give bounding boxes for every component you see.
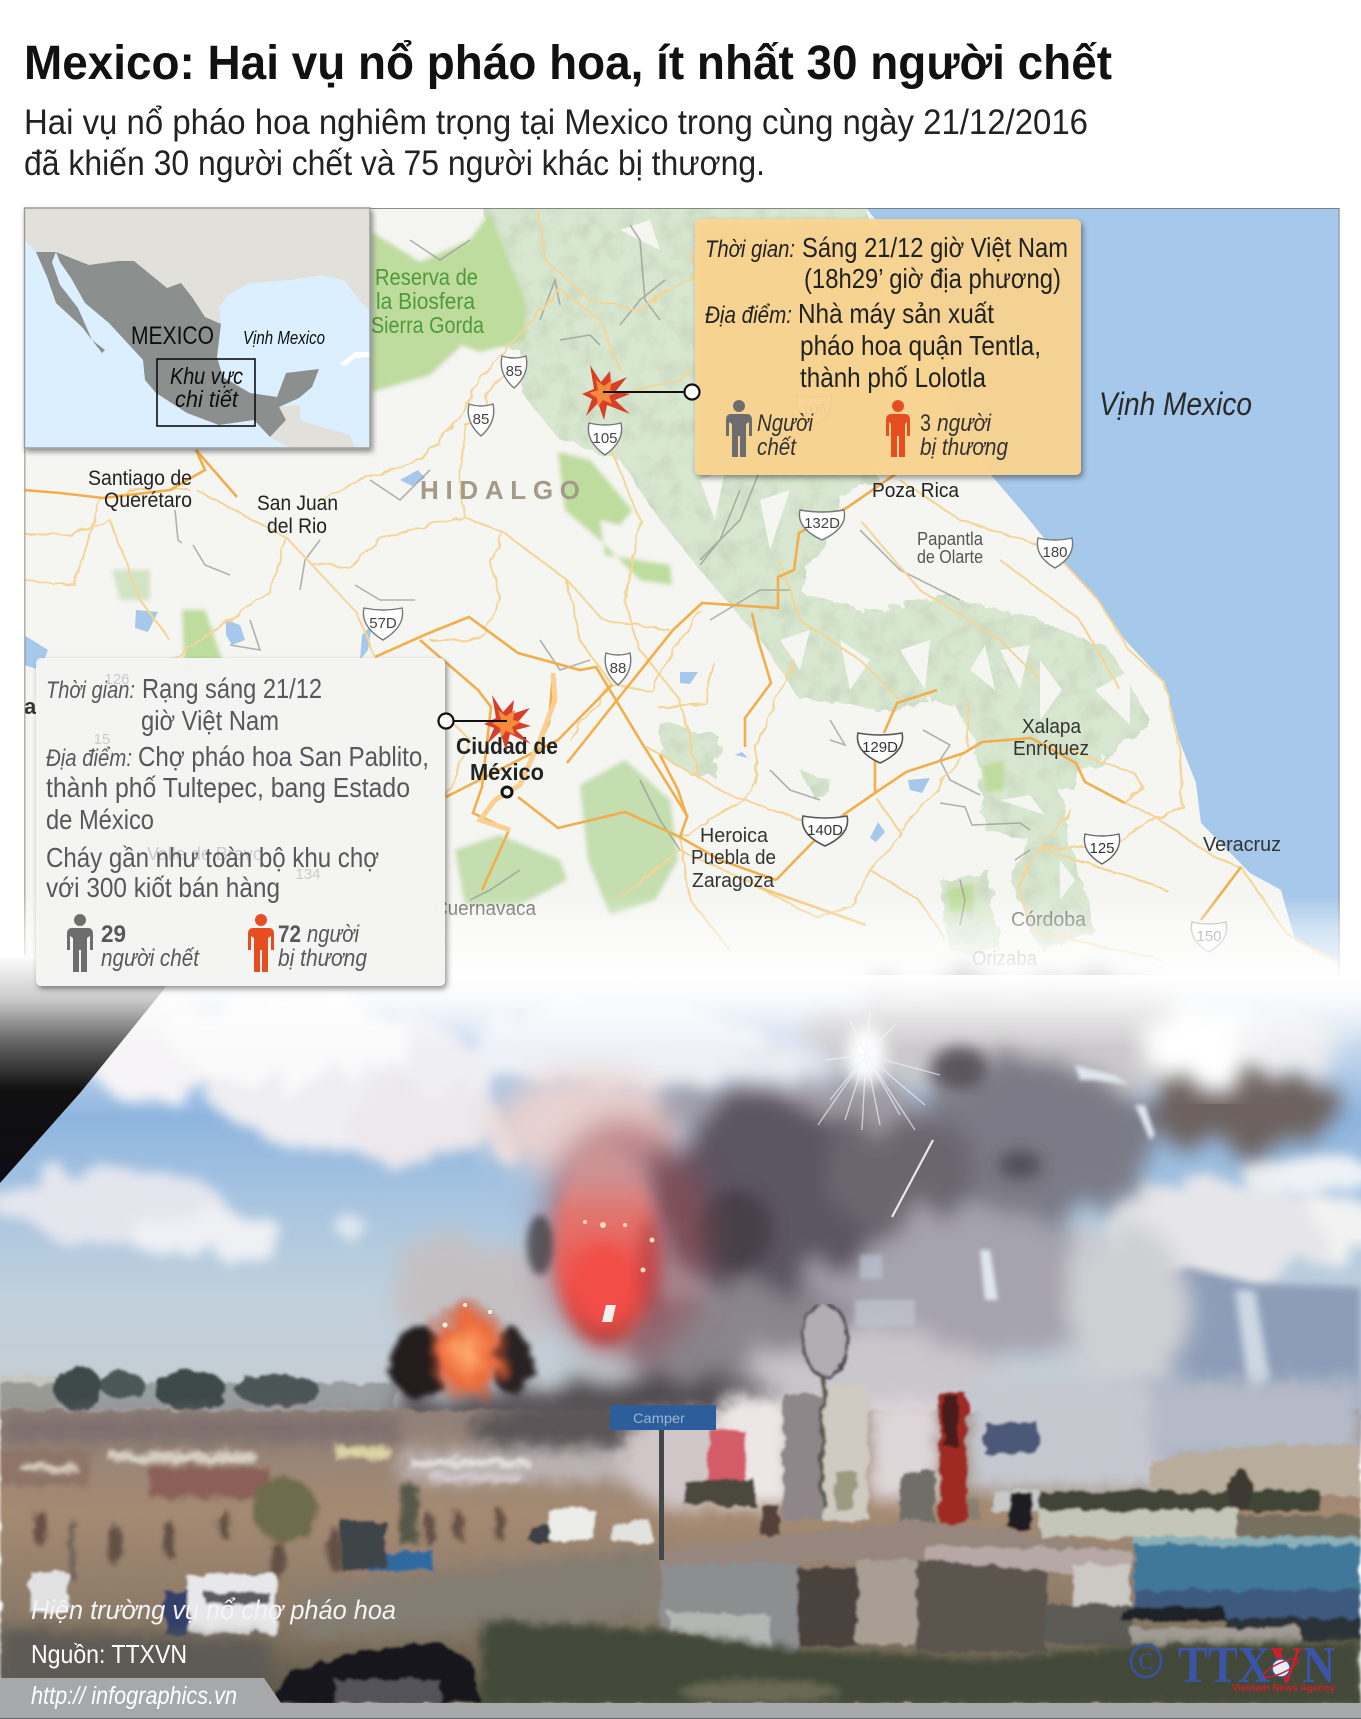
lakes xyxy=(24,470,930,842)
dead label xyxy=(757,410,814,461)
map city labels east and south xyxy=(24,480,1281,970)
time and place text: de México xyxy=(46,804,154,835)
highway shields xyxy=(363,356,1227,952)
faded map labels under box: 134 xyxy=(295,866,321,883)
title: Mexico: Hai vụ nổ pháo hoa, ít nhất 30 người chết xyxy=(24,37,1112,90)
map city labels north: del Rio xyxy=(267,515,327,538)
sky xyxy=(0,975,1361,1420)
Cuba xyxy=(340,352,370,366)
faded map labels under box: Valle de Bravo xyxy=(147,844,263,864)
map city labels east and south: a xyxy=(24,694,37,719)
label: Ciudad de Mexico: México xyxy=(470,759,544,785)
map city labels east and south: Veracruz xyxy=(1203,834,1281,856)
inset labels: Khu vực xyxy=(170,363,243,389)
highway shields: 88 xyxy=(610,660,626,677)
time and place text: Thời gian: xyxy=(705,236,795,263)
highway shields: 140D xyxy=(807,822,843,839)
smoke haze over road xyxy=(0,1380,1361,1510)
footer band with URL xyxy=(0,1678,1361,1719)
marker: Tentla explosion star xyxy=(582,365,700,420)
distant buildings and tree line xyxy=(0,1366,395,1410)
highway shields: 150 xyxy=(1196,928,1222,945)
map city labels east and south: Orizaba xyxy=(972,948,1038,970)
TTXVN logo: C xyxy=(1138,1649,1154,1674)
time and place text: Nhà máy sản xuất xyxy=(798,298,994,329)
callout: San Pablito market xyxy=(36,658,445,986)
highways xyxy=(24,450,1241,925)
sea: Gulf of Mexico xyxy=(866,208,1340,965)
Mexico xyxy=(36,252,319,437)
time and place text: Chợ pháo hoa San Pablito, xyxy=(138,741,429,772)
mountain xyxy=(1100,1267,1361,1440)
reserve label: Reserva de xyxy=(375,264,478,290)
label: Ciudad de Mexico: Ciudad de xyxy=(456,733,558,759)
map city labels east and south: Enríquez xyxy=(1013,738,1089,760)
forest zones xyxy=(470,190,1150,950)
faded map labels under box: 15 xyxy=(94,731,110,748)
dead label: Người xyxy=(757,410,814,437)
injured label: bị thương xyxy=(920,434,1009,461)
detail area rectangle xyxy=(157,359,255,426)
time and place text: Địa điểm: xyxy=(705,302,792,329)
map city labels east and south: Poza Rica xyxy=(872,480,960,502)
frame xyxy=(24,208,1340,985)
time and place text: thành phố Lolotla xyxy=(800,362,986,393)
faded map labels under box xyxy=(94,671,321,883)
small grey roads xyxy=(175,225,1030,925)
pink haze above fire xyxy=(490,1070,690,1180)
lower scene xyxy=(0,1304,1361,1705)
injured label xyxy=(920,410,1009,461)
TTXVN logo: TTXVN xyxy=(1178,1637,1335,1694)
dead count: 29 xyxy=(101,921,126,948)
map city labels east and south: Xalapa xyxy=(1022,716,1082,738)
time and place text: (18h29’ giờ địa phương) xyxy=(804,263,1061,294)
subtitle xyxy=(24,103,1088,183)
faded map labels under box: 126 xyxy=(104,671,130,688)
time and place text: Thời gian: xyxy=(46,677,135,704)
dark smoke cores xyxy=(697,1046,1042,1270)
inset labels: MEXICO xyxy=(131,322,214,350)
blue building xyxy=(1120,1537,1361,1644)
map city labels north xyxy=(88,470,337,533)
fire column xyxy=(527,1120,710,1360)
map fade into photo xyxy=(0,895,1361,980)
small explosion xyxy=(390,1300,530,1404)
icon: dead person xyxy=(67,914,93,972)
highway shields: 105 xyxy=(592,430,618,447)
right field xyxy=(1040,1445,1361,1543)
forest gaps xyxy=(620,220,1130,900)
map city labels east and south: Puebla de xyxy=(691,847,776,869)
injured count: 72 xyxy=(278,921,301,948)
label: Vinh Mexico: Vịnh Mexico xyxy=(1099,386,1252,422)
roadside buildings left xyxy=(0,1447,530,1545)
inset labels xyxy=(131,322,325,412)
dead label: chết xyxy=(757,434,797,461)
map city labels north: San Juan xyxy=(257,492,338,515)
reserve label: la Biosfera xyxy=(376,288,475,314)
marker: Tultepec explosion star xyxy=(438,695,531,750)
reserve label xyxy=(372,268,484,333)
map city labels east and south: Córdoba xyxy=(1011,909,1087,931)
inset labels: chi tiết xyxy=(175,386,240,412)
smoke plume xyxy=(390,980,1340,1460)
source: Nguồn: TTXVN xyxy=(31,1639,187,1669)
time and place text: thành phố Tultepec, bang Estado xyxy=(46,772,410,803)
injured count: bị thương xyxy=(278,945,368,972)
time and place text: Sáng 21/12 giờ Việt Nam xyxy=(802,232,1068,263)
inset frame xyxy=(24,208,370,448)
highway shields: 180 xyxy=(1042,544,1068,561)
highway shields: 85 xyxy=(473,411,489,428)
road sign xyxy=(610,1405,716,1560)
TTXVN logo: Vietnam News Agency xyxy=(1232,1683,1335,1694)
map city labels east and south: Papantla xyxy=(917,529,984,549)
pink billboard xyxy=(709,1430,745,1485)
icon: dead person xyxy=(726,400,752,457)
highway shields: 57D xyxy=(369,615,397,632)
highway shields: 132D xyxy=(804,515,840,532)
road sign: Camper xyxy=(633,1410,685,1426)
clouds xyxy=(0,987,1361,1290)
secondary roads xyxy=(24,210,1339,963)
Central America xyxy=(270,405,355,448)
highway shields: 106 xyxy=(801,401,827,418)
highway shields: 125 xyxy=(1089,840,1115,857)
subtitle: Hai vụ nổ pháo hoa nghiêm trọng tại Mexico trong cùng ngày 21/12/2016 xyxy=(24,103,1088,142)
injured count xyxy=(278,921,368,972)
state label: HIDALGO xyxy=(420,475,580,505)
pale patch xyxy=(680,1680,840,1704)
time and place text: Rạng sáng 21/12 xyxy=(142,673,322,704)
top fade xyxy=(0,975,1361,1050)
footer band with URL: http:// infographics.vn xyxy=(31,1682,237,1710)
time and place text: Cháy gần như toàn bộ khu chợ xyxy=(46,842,379,873)
red pillar xyxy=(939,1393,967,1523)
small dark storefronts xyxy=(685,1470,1042,1535)
injured label: 3 xyxy=(920,410,931,437)
mountain haze streak xyxy=(1235,1290,1270,1400)
highway shields: 85 xyxy=(506,363,522,380)
time and place text: pháo hoa quận Tentla, xyxy=(800,330,1041,361)
foreground left xyxy=(0,1625,270,1703)
bright green reserves xyxy=(112,212,1004,915)
icon: injured person xyxy=(886,400,910,457)
dead count: người chết xyxy=(101,945,200,972)
photo caption: Hiện trường vụ nổ chợ pháo hoa xyxy=(31,1595,396,1625)
injured label: người xyxy=(937,410,992,437)
firework burst xyxy=(818,1012,940,1217)
highway shields: 129D xyxy=(862,739,898,756)
time and place text: giờ Việt Nam xyxy=(141,705,279,736)
north land xyxy=(24,208,370,324)
time and place text: với 300 kiốt bán hàng xyxy=(46,872,280,903)
map city labels east and south: Zaragoza xyxy=(692,870,775,892)
inset labels: Vịnh Mexico xyxy=(243,328,325,348)
label: Ciudad de Mexico xyxy=(456,733,558,797)
time and place text: Địa điểm: xyxy=(46,745,132,772)
panel: main map xyxy=(24,190,1340,988)
photo: explosion scene xyxy=(0,955,1361,1705)
time and place text xyxy=(46,673,429,903)
inset locator map xyxy=(24,208,370,448)
sheds xyxy=(660,1520,1134,1652)
ground xyxy=(0,1410,1361,1705)
Mexico City urban area xyxy=(480,673,555,830)
time and place text xyxy=(705,232,1068,393)
callout: Tentla explosion xyxy=(695,219,1081,475)
subtitle: đã khiến 30 người chết và 75 người khác bị thương. xyxy=(24,144,765,183)
foreground vegetation xyxy=(482,1620,1361,1703)
map city labels east and south: Heroica xyxy=(700,825,769,847)
car hood silhouette xyxy=(268,1643,482,1703)
map city labels north: Santiago de xyxy=(88,467,192,490)
bright debris on smoke xyxy=(855,1065,1155,1326)
blue billboard xyxy=(984,1422,1038,1454)
road xyxy=(300,1545,660,1640)
white cloud tops on smoke xyxy=(690,1003,1345,1087)
dead count xyxy=(101,921,200,972)
map city labels north: Querétaro xyxy=(104,489,192,512)
dark windshield corner xyxy=(0,955,190,1183)
map city labels east and south: Cuernavaca xyxy=(434,898,537,920)
vehicles xyxy=(30,1510,652,1635)
injured count: người xyxy=(307,921,360,948)
tower with arch xyxy=(783,1304,868,1520)
figures on field xyxy=(33,1509,637,1618)
icon: injured person xyxy=(248,914,274,972)
reserve label: Sierra Gorda xyxy=(371,312,484,338)
map city labels east and south: de Olarte xyxy=(917,547,983,567)
